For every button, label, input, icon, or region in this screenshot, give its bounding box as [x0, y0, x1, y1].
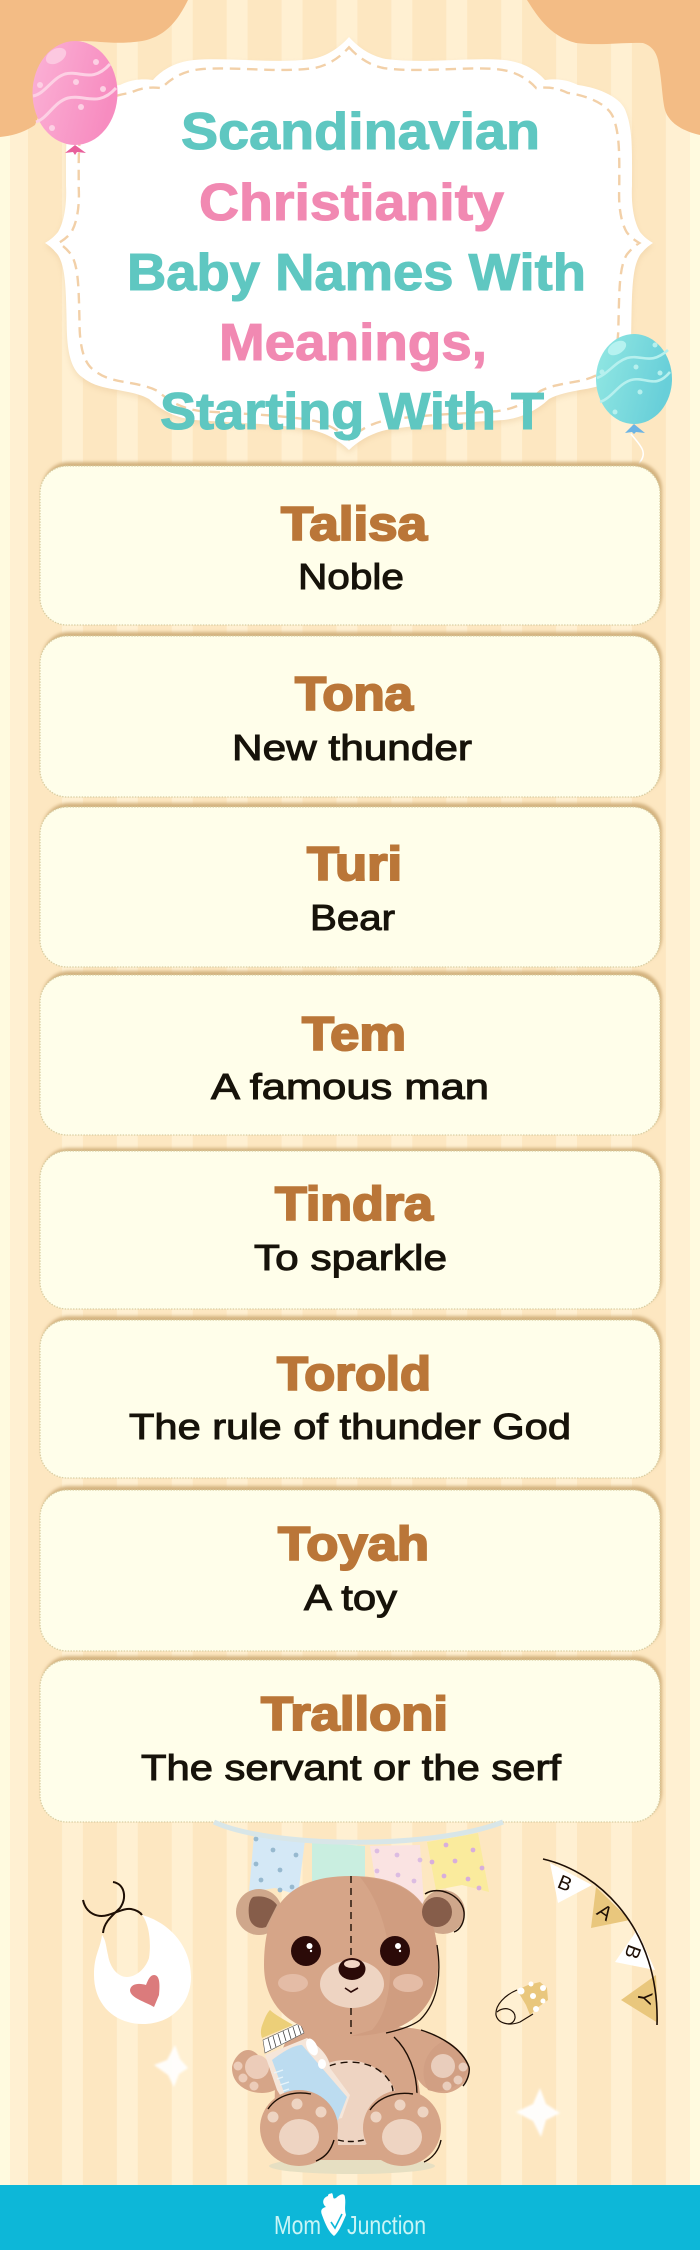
panel: Tralloni: Tralloni: [261, 1687, 448, 1740]
teddy ears: [236, 1889, 465, 1935]
panel: Tem: A famous man: [211, 1066, 489, 1107]
icon: pink balloon: [32, 41, 118, 155]
panel: Tona: [40, 636, 660, 797]
panel: Tindra: To sparkle: [254, 1237, 447, 1278]
teddy left foot: [260, 2090, 338, 2166]
icon: safety pin: [496, 1982, 548, 2024]
panel: Toyah: Toyah: [278, 1517, 429, 1570]
footer bar: [0, 2185, 700, 2250]
icon: baby bottle: [261, 2010, 350, 2128]
panel: Toyah: [40, 1490, 660, 1651]
logo: MomJunction: [274, 2193, 426, 2240]
title plaque: [45, 37, 653, 453]
icon: BABY banner: B: [554, 1871, 575, 1897]
title: Scandinavian: [181, 103, 540, 161]
icon: star right: [516, 2088, 560, 2137]
panel: Tindra: Tindra: [275, 1177, 434, 1230]
panel: Talisa: Noble: [298, 556, 404, 597]
bunting flags: [214, 1822, 503, 1905]
curtain: left: [0, 0, 188, 137]
panel: Tindra: [40, 1151, 660, 1309]
title: Christianity: [199, 174, 504, 232]
panel: Turi: [40, 807, 660, 967]
icon: bib: [83, 1882, 191, 2024]
icon: BABY banner: A: [593, 1900, 617, 1926]
title: Baby Names With: [127, 244, 586, 302]
panel: Talisa: [40, 466, 660, 625]
panel: Tem: [40, 975, 660, 1135]
panel: Torold: Torold: [277, 1347, 431, 1400]
panel: Tralloni: The servant or the serf: [141, 1747, 562, 1788]
title: Meanings,: [219, 314, 487, 372]
panel: Tona: New thunder: [232, 727, 472, 768]
panel: card shadows: [42, 462, 662, 1819]
title: Starting With T: [160, 383, 544, 441]
teddy head: [264, 1876, 452, 2036]
title: [127, 103, 586, 441]
panel: Turi: Bear: [310, 897, 395, 938]
teddy right foot: [363, 2090, 441, 2166]
panel: Turi: Turi: [307, 837, 402, 890]
icon: BABY banner: Y: [632, 1989, 656, 2006]
panel: Torold: The rule of thunder God: [129, 1406, 571, 1447]
panel: Talisa: Talisa: [281, 497, 428, 550]
icon: BABY banner: B: [619, 1942, 645, 1962]
icon: star left: [154, 2045, 188, 2087]
panel: Tralloni: [40, 1660, 660, 1822]
logo: MomJunction: Junction: [347, 2210, 426, 2240]
panel: Tem: Tem: [302, 1007, 406, 1060]
panel: Tona: Tona: [295, 667, 414, 720]
panel: Torold: [40, 1320, 660, 1478]
icon: blue balloon: [596, 334, 672, 472]
panel: Toyah: A toy: [304, 1577, 397, 1618]
icon: BABY banner: [543, 1859, 658, 2025]
curtain: right: [527, 0, 700, 135]
icon: teddy bear: [232, 1876, 469, 2174]
logo: MomJunction: Mom: [274, 2210, 321, 2240]
